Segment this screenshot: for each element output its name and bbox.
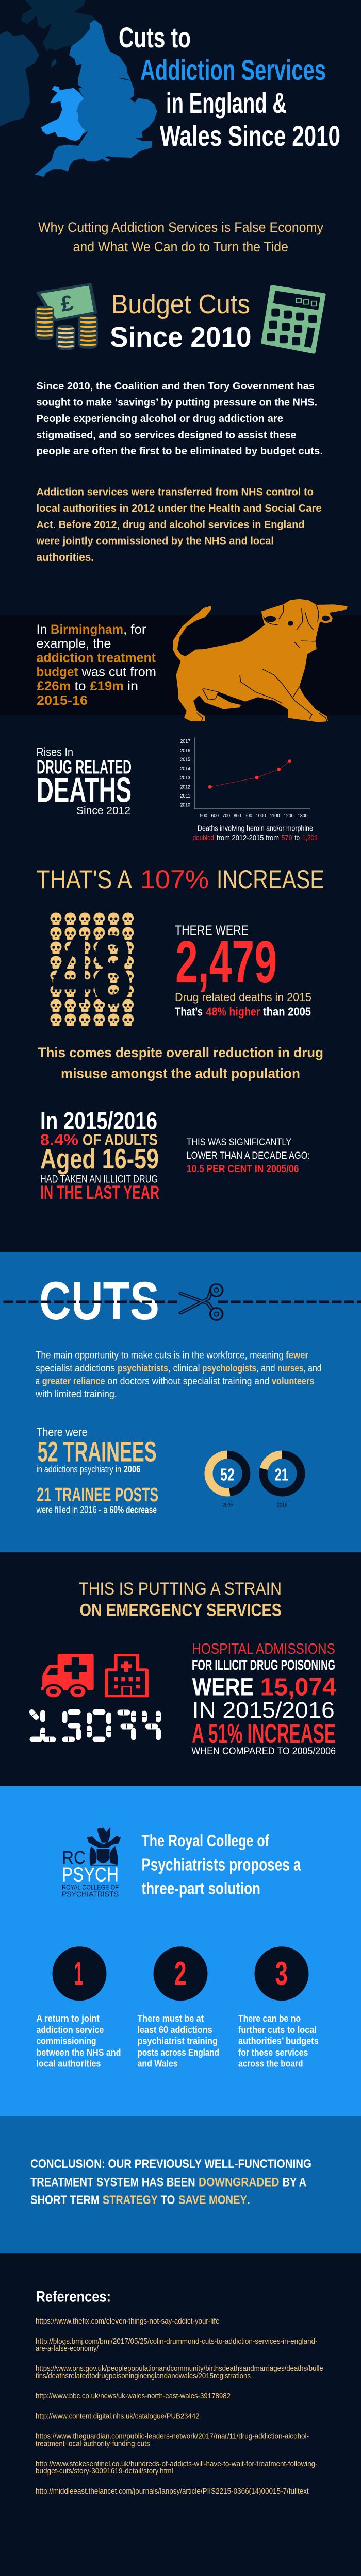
heading: 107% increase: INCREASE (217, 865, 324, 894)
references list: https://www.thefix.com/eleven-things-not-say-addict-your-life (36, 2317, 219, 2326)
logo: Royal College of Psychiatrists: PSYCHIATRISTS (62, 1890, 119, 1899)
text block: workforce cuts: , and (303, 1363, 322, 1374)
text block: workforce cuts: fewer (286, 1350, 309, 1361)
text block: workforce cuts: , and (256, 1363, 275, 1374)
number badge 1: 1 (74, 1955, 83, 1992)
line chart: deaths involving heroin/morphine: 1200 (284, 812, 294, 819)
icon: ambulance (41, 1654, 94, 1699)
text block: workforce cuts: a (36, 1376, 40, 1387)
heading: rises in drug related deaths: Since 2012 (76, 805, 130, 817)
heading: three-part solution: The Royal College of (141, 1831, 270, 1850)
stat block: 8.4% of adults: HAD TAKEN AN ILLICIT DRUG (40, 1174, 158, 1185)
heading: Budget Cuts Since 2010 (110, 290, 252, 353)
text block: conclusion: STRATEGY (103, 2193, 158, 2207)
stat: 2,479 deaths: Drug related deaths in 2015 (175, 991, 311, 1004)
text block: solution 3: for these services (238, 2047, 308, 2058)
text block: conclusion: SAVE MONEY (178, 2193, 247, 2207)
heading: CUTS: CUTS (39, 1271, 159, 1331)
logo: Royal College of Psychiatrists (62, 1827, 121, 1899)
text block: lower than a decade ago: LOWER THAN A DECADE AGO: (187, 1150, 310, 1161)
line chart: deaths involving heroin/morphine: 1100 (270, 812, 280, 819)
icon: calculator (263, 286, 324, 352)
logo: Royal College of Psychiatrists: PSYCH (62, 1864, 119, 1886)
text block: intro: Since 2010, the Coalition and then Tory Government has (36, 380, 315, 392)
line chart: deaths involving heroin/morphine: 700 (223, 812, 230, 819)
text block: solution 2: and Wales (137, 2059, 178, 2069)
text block: reduction in drug misuse (38, 1045, 323, 1081)
text block: conclusion: SHORT TERM (30, 2193, 100, 2207)
title (119, 21, 340, 152)
line chart: deaths involving heroin/morphine: 1300 (298, 812, 308, 819)
chart caption: 579 (282, 834, 292, 842)
heading: rises in drug related deaths (36, 745, 132, 817)
icon: banknote and coins (35, 284, 98, 350)
stat block: 8.4% of adults (40, 1107, 159, 1203)
text block: solution 1: commissioning (36, 2036, 96, 2046)
stat block: hospital admissions: IN 2015/2016 (192, 1698, 335, 1723)
chart caption: 1,201 (302, 834, 318, 842)
number badge 2 (154, 1946, 207, 2001)
donut chart: 2006 (208, 1455, 247, 1509)
text block: intro (36, 380, 323, 457)
line chart: deaths involving heroin/morphine: 2017 (180, 738, 190, 744)
map: Wales (41, 86, 85, 141)
text block: workforce cuts: specialist addictions (36, 1363, 115, 1374)
text block: transfer to local authorities: Act. Before 2012, drug and alcohol services in England (36, 519, 304, 531)
stat block: 8.4% of adults: In 2015/2016 (40, 1107, 157, 1134)
subtitle: and What We Can do to Turn the Tide (73, 239, 288, 255)
line chart: deaths involving heroin/morphine (180, 737, 310, 819)
stat: 2,479 deaths: That’s (175, 1005, 203, 1019)
text block: Birmingham budget: Birmingham (51, 622, 123, 637)
heading: three-part solution: Psychiatrists proposes a (141, 1855, 301, 1874)
references list: budget-cuts/story-30091619-detail/story.html (36, 2467, 173, 2476)
stat block: hospital admissions: WHEN COMPARED TO 2005/2006 (191, 1746, 336, 1757)
heading: 107% increase (36, 865, 324, 894)
text block: solution 3: There can be no (238, 2013, 301, 2024)
text block: solution 1: A return to joint (36, 2013, 100, 2024)
text block: intro: People experiencing alcohol or drug addiction are (36, 413, 283, 425)
references list: are-a-false-economy/ (36, 2344, 99, 2353)
text block: Birmingham budget: In (36, 622, 47, 637)
title: Cuts to (119, 21, 191, 54)
stat: 2,479 deaths: 48% higher (206, 1005, 260, 1019)
stat block: hospital admissions: 15,074 (260, 1674, 336, 1701)
text block: conclusion: . (248, 2193, 250, 2207)
text block: lower than a decade ago: THIS WAS SIGNIFICANTLY (187, 1137, 291, 1148)
text block: Birmingham budget: in (127, 679, 138, 693)
text block: conclusion: CONCLUSION: OUR PREVIOUSLY WELL-FUNCTIONING (30, 2157, 311, 2171)
map: England (35, 20, 157, 177)
logo: Royal College of Psychiatrists: RC (62, 1847, 86, 1868)
stat: 2,479 deaths: than 2005 (263, 1005, 311, 1019)
map: Scotland (21, 0, 95, 52)
text block: workforce cuts: greater reliance (42, 1376, 105, 1387)
text block: Birmingham budget: budget (36, 665, 78, 680)
text block: workforce cuts (35, 1350, 322, 1400)
text block: solution 3: across the board (238, 2059, 303, 2069)
text block: Birmingham budget: was cut from (81, 665, 156, 680)
number badge 2: 2 (174, 1955, 187, 1992)
text block: intro: sought to make ‘savings’ by putting pressure on the NHS. (36, 397, 317, 408)
stat block: trainees: were filled in 2016 - a (36, 1505, 108, 1515)
number badge 3 (255, 1946, 308, 2001)
references list (36, 2317, 323, 2496)
heading: 107% increase: 107% (140, 865, 209, 894)
stat block: 8.4% of adults: OF ADULTS (83, 1131, 158, 1149)
stat block: hospital admissions (191, 1641, 336, 1757)
line chart: deaths involving heroin/morphine: 600 (211, 812, 219, 819)
text block: Birmingham budget: addiction treatment (36, 651, 156, 665)
line chart: deaths involving heroin/morphine: 2015 (180, 756, 190, 762)
icon: banknote and coins: £ (59, 290, 75, 316)
heading: three-part solution: three-part solution (141, 1879, 260, 1898)
text block: lower than a decade ago: 10.5 PER CENT IN 2005/06 (187, 1164, 299, 1175)
text block: solution 1: addiction service (36, 2025, 104, 2035)
text block: workforce cuts: volunteers (272, 1376, 314, 1387)
text block: lower than a decade ago (187, 1137, 310, 1175)
references heading: References: (36, 2289, 111, 2306)
stat block: 8.4% of adults: 8.4% (40, 1131, 78, 1149)
map: Isle of Man (51, 58, 57, 68)
line chart: deaths involving heroin/morphine: 900 (244, 812, 252, 819)
line chart: deaths involving heroin/morphine: 2013 (180, 775, 190, 781)
icon grid: skulls with 48 cut out: 48 (52, 916, 132, 1024)
references list: http://blogs.bmj.com/bmj/2017/05/25/colin-drummond-cuts-to-addiction-services-in-england- (36, 2337, 318, 2346)
line chart: deaths involving heroin/morphine: 2010 (180, 802, 190, 808)
heading: Budget Cuts Since 2010: Since 2010 (110, 321, 252, 353)
heading: rises in drug related deaths: DRUG RELATED (37, 757, 132, 778)
map: Ireland (0, 31, 39, 126)
panel: conclusion (0, 2116, 361, 2253)
line chart: deaths involving heroin/morphine: 1000 (256, 812, 266, 819)
text block: workforce cuts: nurses (277, 1363, 303, 1374)
text block: Birmingham budget (36, 622, 156, 708)
heading: strain on emergency services: THIS IS PUTTING A STRAIN (79, 1579, 282, 1599)
text block: intro: people are often the first to be eliminated by budget cuts. (36, 445, 323, 457)
number badge 3: 3 (275, 1955, 288, 1992)
text block: Birmingham budget: to (74, 679, 86, 693)
icon: hospital (105, 1654, 149, 1697)
stat: 2,479 deaths (175, 923, 311, 1019)
donut chart: 2006: 52 (220, 1465, 235, 1484)
chart caption: to (294, 834, 300, 842)
references list: http://www.content.digital.nhs.uk/catalogue/PUB23442 (36, 2412, 200, 2421)
text block: solution 3: further cuts to local (238, 2025, 317, 2035)
logo: Royal College of Psychiatrists: ROYAL COLLEGE OF (62, 1884, 119, 1891)
text block: Birmingham budget: , for (123, 622, 146, 637)
panel: three-part solution (0, 1786, 361, 2116)
stat: 2,479 deaths: THERE WERE (175, 923, 249, 938)
text block: solution 1: between the NHS and (36, 2047, 121, 2058)
map of UK and Ireland (0, 0, 157, 177)
line chart: deaths involving heroin/morphine: 2012 (180, 784, 190, 790)
line chart: deaths involving heroin/morphine: 2014 (180, 766, 190, 772)
text block: intro: stigmatised, and so services designed to assist these (36, 429, 296, 441)
text block: solution 1 (36, 2013, 121, 2069)
text block: transfer to local authorities: authorities. (36, 551, 94, 563)
text block: workforce cuts: on doctors without specialist training and (107, 1376, 269, 1387)
text block: conclusion: BY A (283, 2175, 306, 2189)
text block: transfer to local authorities: local authorities in 2012 under the Health and Social Care (36, 502, 322, 514)
text block: Birmingham budget: £26m (37, 679, 71, 693)
text block: conclusion: TREATMENT SYSTEM HAS BEEN (30, 2175, 195, 2189)
text block: solution 2: least 60 addictions (137, 2025, 212, 2035)
icon: Birmingham bull (173, 599, 348, 722)
text block: transfer to local authorities (36, 486, 322, 563)
text block: solution 2: posts across England (137, 2047, 219, 2058)
text block: conclusion: DOWNGRADED (199, 2175, 280, 2189)
text block: workforce cuts: with limited training. (35, 1389, 117, 1400)
icon: scissors (180, 1284, 223, 1320)
donut chart: 2016: 21 (275, 1465, 288, 1484)
heading: strain on emergency services: ON EMERGENCY SERVICES (79, 1601, 282, 1620)
panel: cuts (0, 1252, 361, 1552)
donut chart: 2016 (259, 1451, 305, 1509)
text block: Birmingham budget: £19m (90, 679, 124, 693)
pictogram: 15,074 made of pills (28, 1708, 161, 1742)
number badge 1 (53, 1946, 106, 2001)
text block: transfer to local authorities: were jointly commissioned by the NHS and local (36, 535, 274, 547)
references list: http://www.stokesentinel.co.uk/hundreds-of-addicts-will-have-to-wait-for-treatment-following- (36, 2460, 318, 2468)
heading: Budget Cuts Since 2010: Budget Cuts (111, 290, 250, 319)
chart caption: from 2012-2015 from (217, 834, 279, 842)
line chart: deaths involving heroin/morphine: 800 (234, 812, 241, 819)
heading: three-part solution (141, 1831, 301, 1898)
panel: Birmingham band (0, 615, 361, 715)
chart caption (193, 825, 318, 842)
text block: solution 2 (137, 2013, 219, 2069)
donut chart: 2016: 2016 (277, 1502, 287, 1509)
stat block: trainees: There were (36, 1426, 88, 1439)
stat block: hospital admissions: WERE (192, 1674, 254, 1701)
text block: reduction in drug misuse: misuse amongst the adult population (61, 1066, 300, 1081)
stat block: trainees (36, 1426, 158, 1515)
text block: Birmingham budget: example, the (36, 637, 111, 651)
stat block: trainees: 21 TRAINEE POSTS (37, 1484, 158, 1506)
stat block: trainees: 60% decrease (109, 1505, 157, 1515)
stat block: 8.4% of adults: Aged 16-59 (40, 1143, 159, 1175)
line chart: deaths involving heroin/morphine: 500 (200, 812, 207, 819)
stat block: trainees: 2006 (124, 1464, 140, 1475)
text block: solution 3 (238, 2013, 319, 2069)
text block: workforce cuts: , clinical (168, 1363, 200, 1374)
subtitle: Why Cutting Addiction Services is False Economy (38, 219, 323, 235)
text block: transfer to local authorities: Addiction services were transferred from NHS control to (36, 486, 314, 498)
donut chart: 2006: 2006 (223, 1502, 233, 1509)
dashed cut line (3, 1300, 361, 1303)
text block: conclusion: TO (161, 2193, 175, 2207)
heading: rises in drug related deaths: DEATHS (37, 771, 132, 810)
text block: solution 2: psychiatrist training (137, 2036, 218, 2046)
references list: https://www.ons.gov.uk/peoplepopulationandcommunity/birthsdeathsandmarriages/deaths/bulle (36, 2364, 323, 2373)
references list: tins/deathsrelatedtodrugpoisoninginenglandandwales/2015registrations (36, 2371, 251, 2380)
text block: solution 1: local authorities (36, 2059, 101, 2069)
heading: rises in drug related deaths: Rises In (36, 745, 73, 759)
text block: workforce cuts: The main opportunity to make cuts is in the workforce, meaning (36, 1350, 284, 1361)
chart caption: doubled (193, 834, 214, 842)
references list: https://www.theguardian.com/public-leaders-network/2017/mar/11/drug-addiction-alcohol- (36, 2432, 309, 2441)
text block: solution 2: There must be at (137, 2013, 204, 2024)
stat block: 8.4% of adults: IN THE LAST YEAR (40, 1182, 159, 1203)
title: in England & (166, 87, 287, 119)
text block: workforce cuts: psychiatrists (118, 1363, 168, 1374)
heading: strain on emergency services (79, 1579, 282, 1620)
line chart: deaths involving heroin/morphine: 2016 (180, 748, 190, 754)
text block: reduction in drug misuse: This comes despite overall reduction in drug (38, 1045, 323, 1060)
references list: http://www.bbc.co.uk/news/uk-wales-north-east-wales-39178982 (36, 2392, 231, 2400)
text block: solution 3: authorities’ budgets (238, 2036, 319, 2046)
text block: Birmingham budget: 2015-16 (37, 693, 88, 708)
subtitle (38, 219, 323, 255)
text block: workforce cuts: psychologists (202, 1363, 256, 1374)
chart caption: Deaths involving heroin and/or morphine (198, 825, 313, 833)
heading: 107% increase: THAT'S A (36, 865, 133, 894)
references list: treatment-local-authority-funding-cuts (36, 2439, 150, 2448)
stat block: hospital admissions: HOSPITAL ADMISSIONS (192, 1641, 335, 1657)
text block: conclusion (30, 2157, 311, 2207)
stat block: trainees: 52 TRAINEES (38, 1435, 157, 1468)
stat: 2,479 deaths: 2,479 (175, 928, 277, 995)
line chart: deaths involving heroin/morphine: 2011 (180, 793, 190, 799)
references list: http://middleeast.thelancet.com/journals/lanpsy/article/PIIS2215-0366(14)00015-7/fulltext (36, 2487, 309, 2496)
stat block: trainees: in addictions psychiatry in (36, 1464, 121, 1475)
